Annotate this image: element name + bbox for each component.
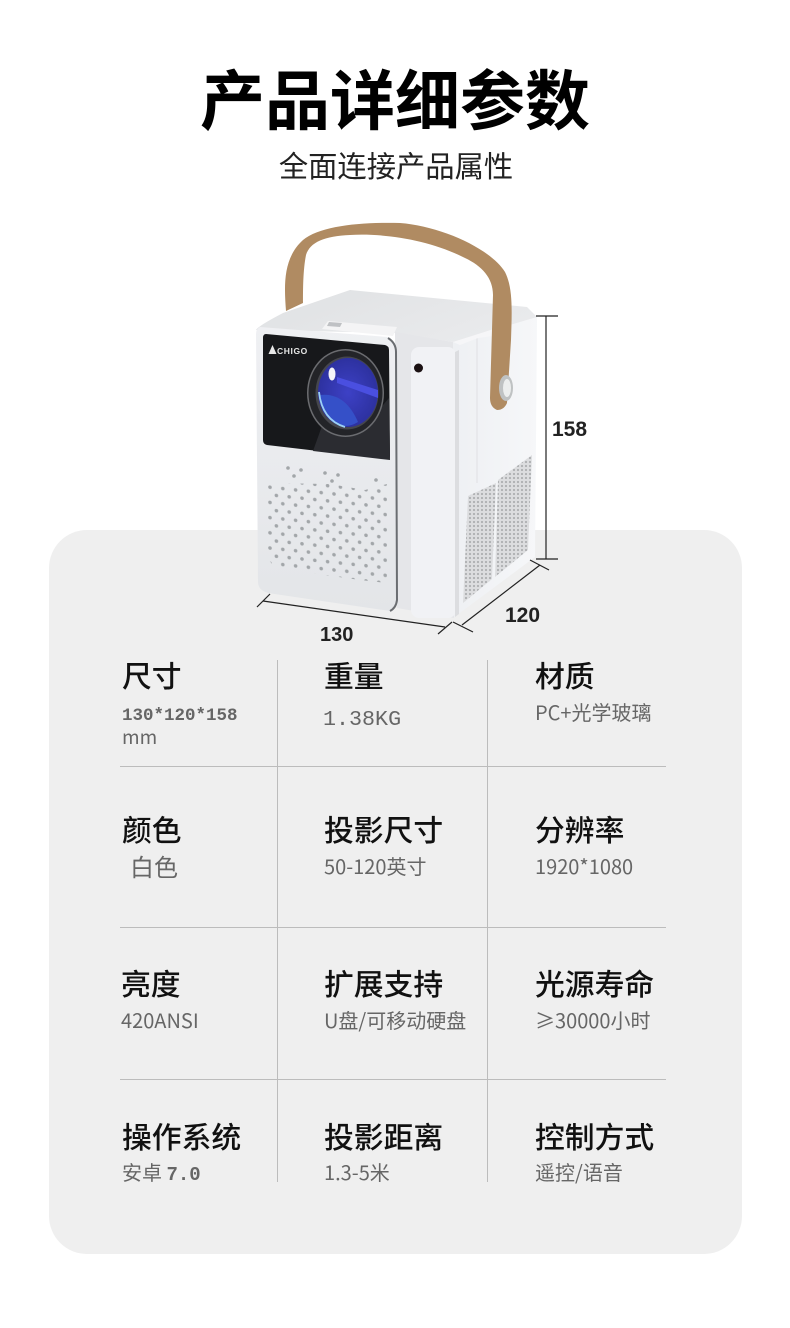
spec: 控制方式 [535,1122,654,1186]
side face [453,317,537,618]
top recess [322,321,397,336]
spec: 颜色: 颜色 [122,815,182,848]
spec: 操作系统: 操作系统 [122,1122,241,1155]
spec: 控制方式: 控制方式 [535,1122,654,1155]
spec: 颜色: 白色 [130,848,178,883]
spec: 投影尺寸: 50-120英寸 [324,851,426,880]
brand logo: CHIGO [277,346,308,356]
spec: 扩展支持: 扩展支持 [324,969,443,1002]
spec: 材质 [535,661,652,726]
title: 产品详细参数 [200,65,590,138]
spec: 控制方式: 遥控/语音 [535,1157,623,1186]
side vents [463,455,532,603]
spec: 分辨率: 分辨率 [535,815,624,848]
spec: 光源寿命: ≥30000小时 [535,1005,650,1034]
spec: 尺寸 [122,661,238,750]
spec: 分辨率: 1920*1080 [535,851,633,880]
dimension label: 120: 120 [505,604,540,627]
lens [307,349,384,437]
spec: 尺寸: 尺寸 [122,661,182,694]
spec: 亮度 [121,969,199,1034]
spec: 操作系统 [122,1122,241,1186]
product illustration: projector with dimensions [256,222,587,646]
spec: 重量: 1.38KG [323,707,401,732]
spec: 操作系统: 安卓 7.0 [122,1157,201,1186]
spec: 投影距离: 投影距离 [324,1122,443,1155]
spec: 颜色 [122,815,182,883]
spec: 投影距离 [324,1122,443,1186]
carrying handle [285,223,513,410]
subtitle: 全面连接产品属性 [279,151,513,184]
black display panel [263,334,390,459]
spec: 分辨率 [535,815,633,880]
projector body [256,290,537,618]
spec: 材质: PC+光学玻璃 [535,697,652,726]
panel: specifications background [49,530,742,1254]
spec: 投影距离: 1.3-5米 [324,1157,390,1186]
spec: 光源寿命 [535,969,654,1034]
front strip [395,332,454,618]
spec: 扩展支持 [324,969,466,1034]
spec: 重量: 重量 [324,661,384,694]
top face [256,290,537,342]
spec: 尺寸: 130*120*158 [122,706,238,726]
front panel [256,327,397,611]
dimension line: height 158 [536,316,558,559]
spec: 尺寸: mm [122,723,157,750]
spec: 材质: 材质 [535,661,595,694]
indicator light [414,364,423,372]
dimension label: 130: 130 [320,624,353,646]
dimension line: depth 120 [453,560,549,632]
spec: 光源寿命: 光源寿命 [535,969,654,1002]
speaker holes [266,466,387,583]
spec: 重量 [323,661,401,732]
spec: 亮度: 420ANSI [121,1005,199,1034]
spec: 亮度: 亮度 [121,969,181,1002]
dimension label: 158: 158 [552,418,587,441]
spec: 投影尺寸 [324,815,443,880]
dimension line: width 130 [257,594,452,634]
spec: 投影尺寸: 投影尺寸 [324,815,443,848]
spec: 扩展支持: U盘/可移动硬盘 [324,1005,466,1034]
